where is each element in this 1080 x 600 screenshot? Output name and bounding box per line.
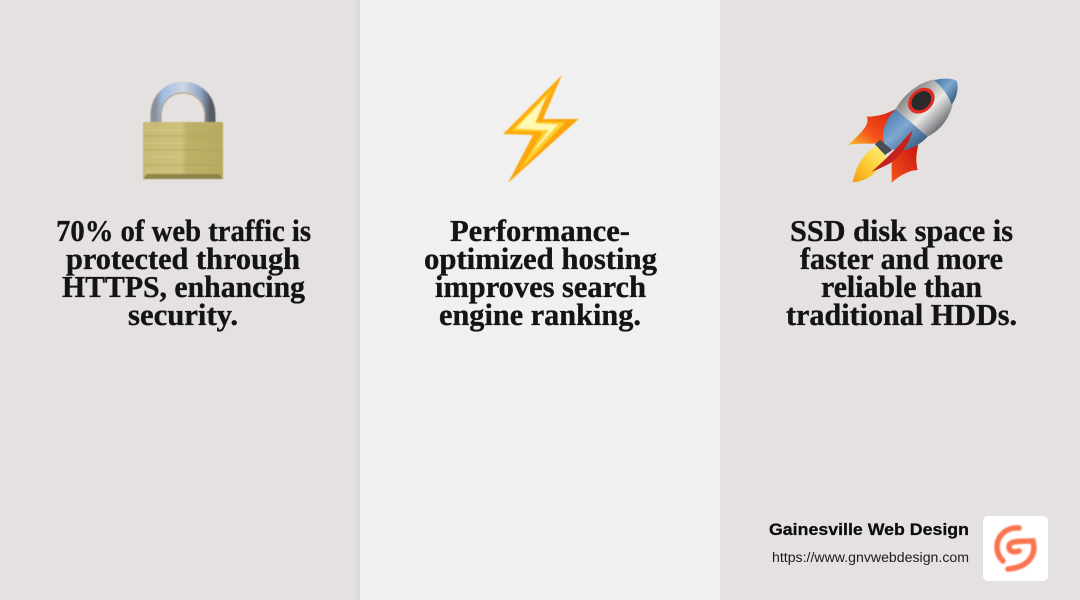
heading: https security (56, 213, 311, 332)
heading: ssd storage (786, 213, 1017, 332)
heading: performance hosting (424, 213, 657, 332)
panel shadow (358, 0, 722, 600)
heading: https security: 70% of web traffic is (56, 213, 311, 248)
icon: rocket (848, 79, 958, 183)
heading: performance hosting: Performance- (450, 213, 630, 248)
heading: https security: protected through (66, 241, 300, 276)
heading: ssd storage: SSD disk space is (790, 213, 1013, 248)
heading: performance hosting: improves search (435, 269, 646, 304)
heading: ssd storage: reliable than (821, 269, 982, 304)
heading: https security: HTTPS, enhancing (62, 269, 305, 304)
text: brand name: Gainesville Web Design (769, 520, 969, 539)
icon: padlock (143, 87, 223, 179)
heading: https security: security. (128, 297, 238, 332)
heading: performance hosting: optimized hosting (424, 241, 657, 276)
heading: performance hosting: engine ranking. (439, 297, 641, 332)
panel: performance (360, 0, 720, 600)
text: website url: https://www.gnvwebdesign.com (772, 550, 969, 565)
heading: ssd storage: traditional HDDs. (786, 297, 1017, 332)
icon: company logo (983, 516, 1048, 581)
heading: ssd storage: faster and more (800, 241, 1003, 276)
icon: lightning bolt (503, 75, 578, 183)
panel: storage (720, 0, 1080, 600)
panel: security (0, 0, 360, 600)
